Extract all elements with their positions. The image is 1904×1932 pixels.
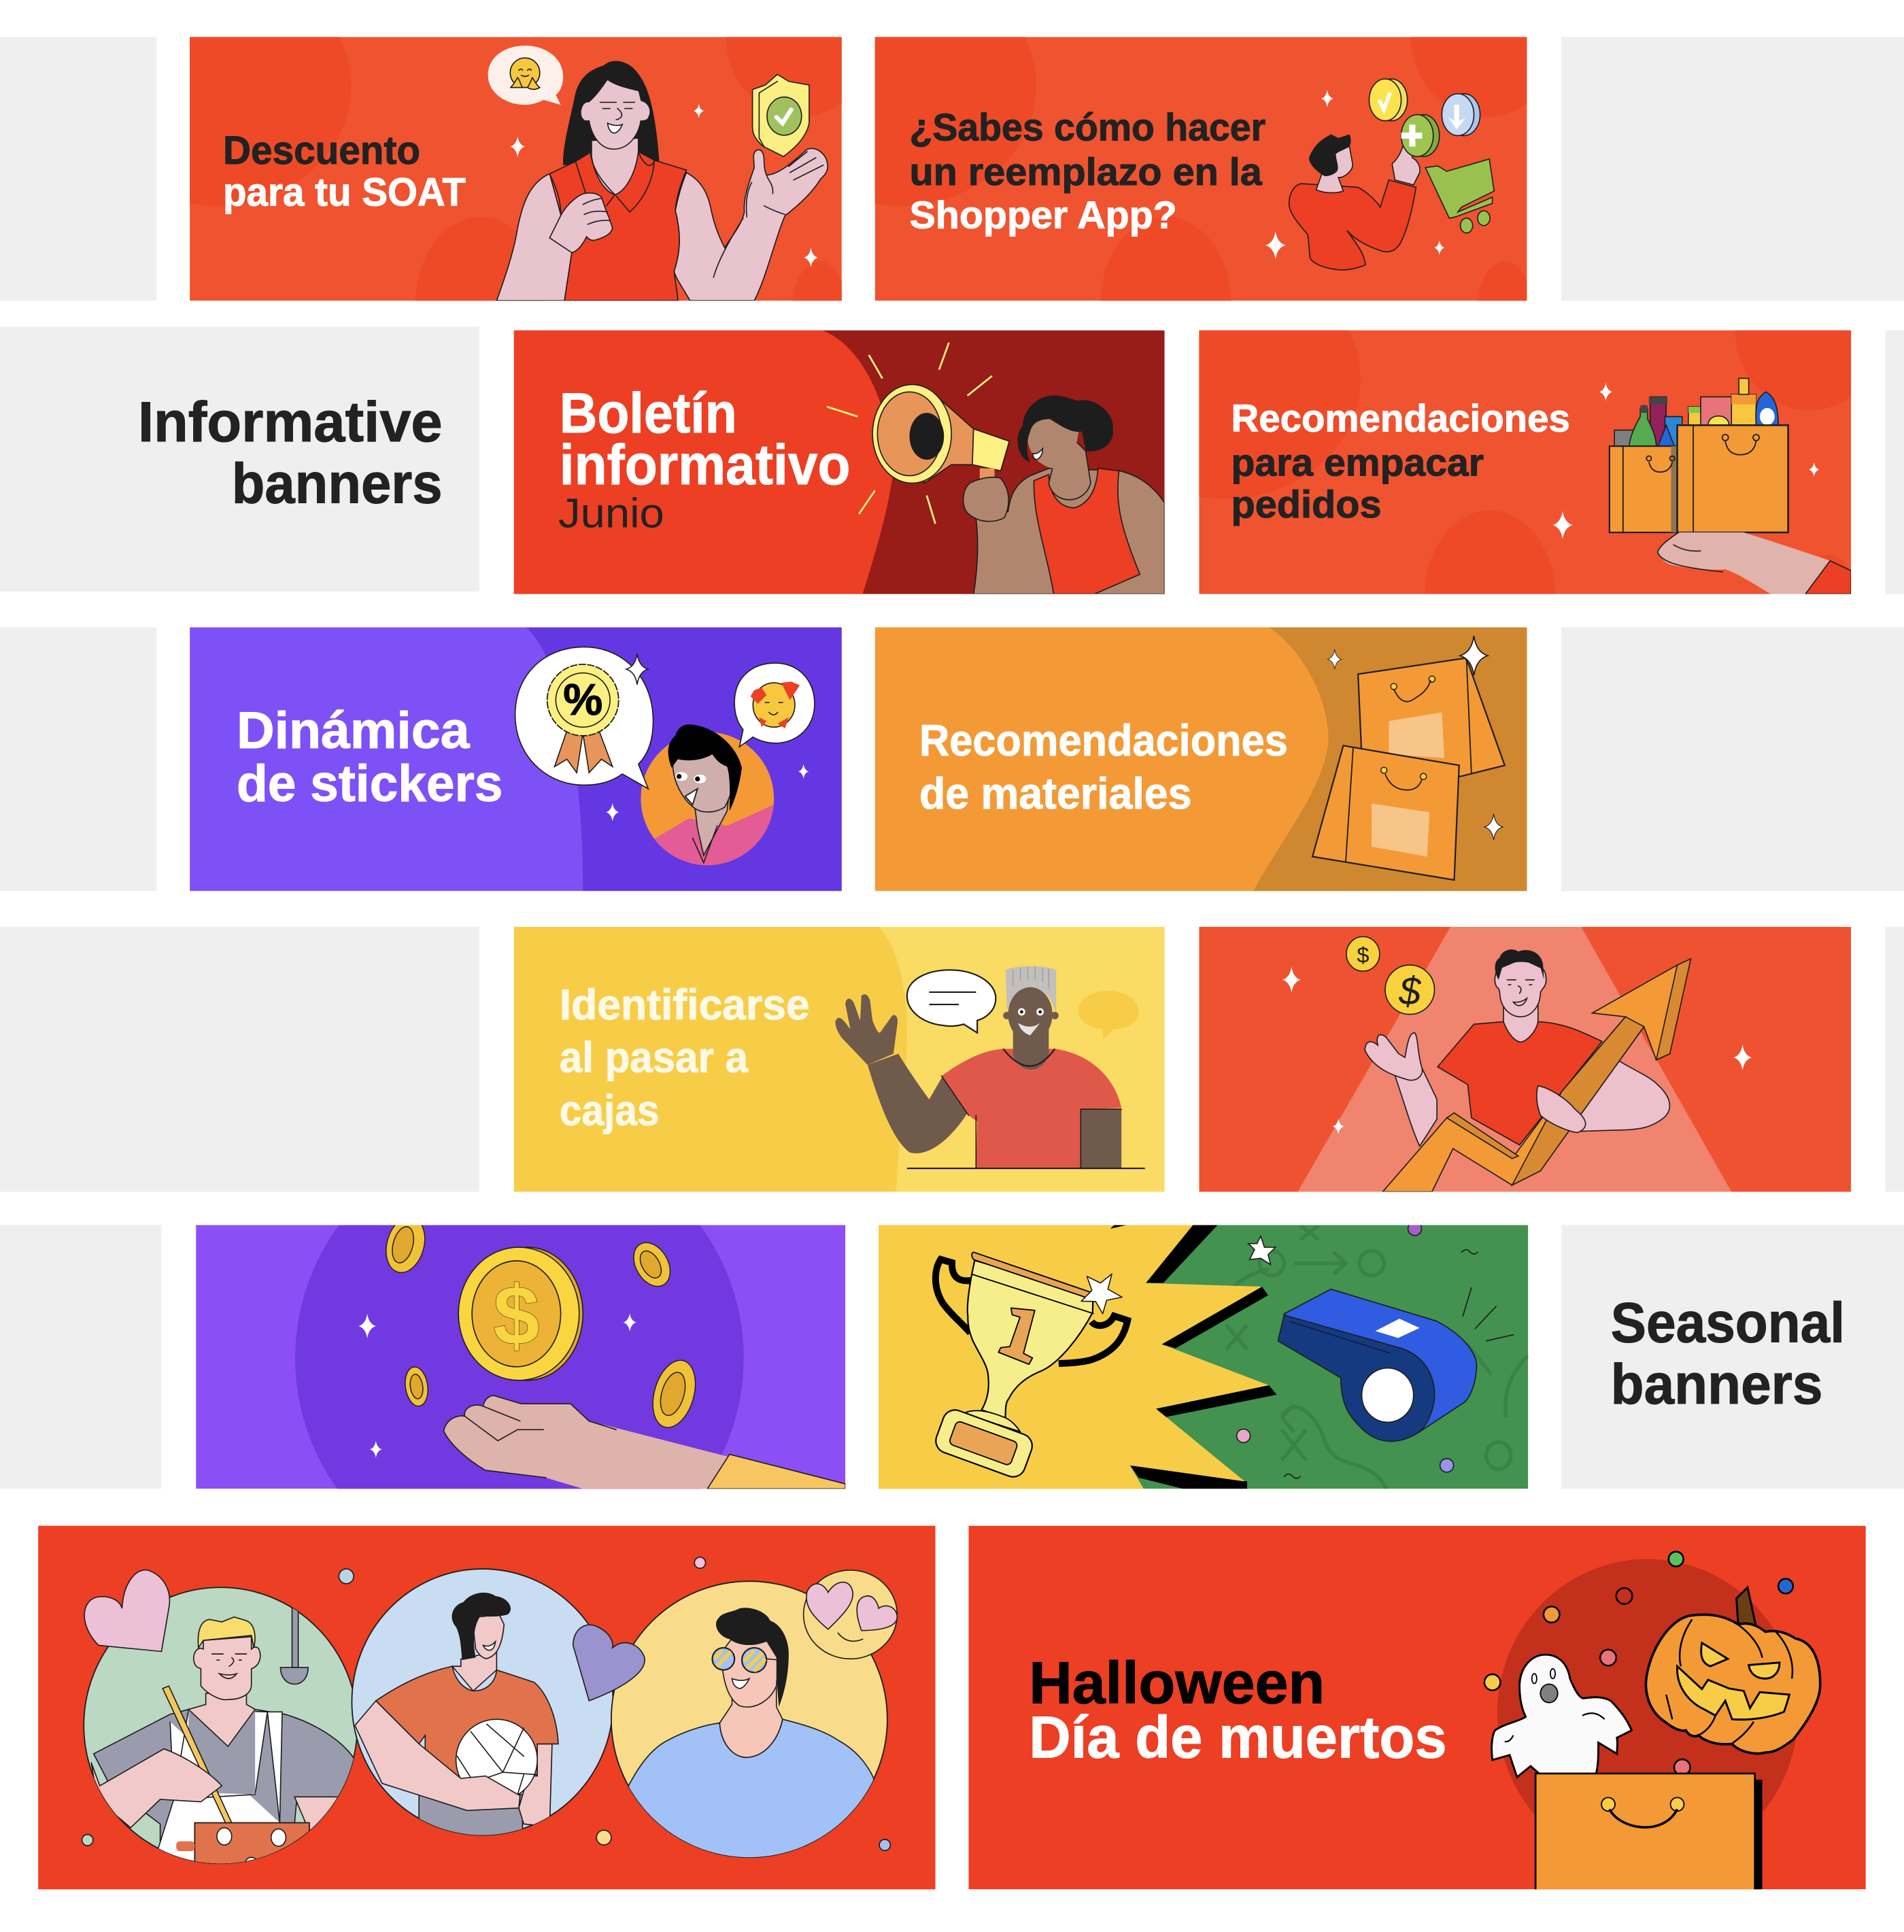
heading: informativo — [560, 433, 850, 496]
portrait — [641, 724, 774, 865]
decorative star and dots — [1237, 1222, 1478, 1478]
heading: Día de muertos — [1029, 1704, 1447, 1770]
portrait: man with glasses — [611, 1581, 887, 1867]
heading: al pasar a — [560, 1034, 749, 1082]
sparkles — [1265, 90, 1444, 260]
panel: descuento SOAT banner — [190, 37, 842, 301]
icons: app buttons — [1369, 79, 1480, 156]
heading: Descuento — [223, 129, 420, 173]
heading: un reemplazo en la — [909, 150, 1263, 193]
heading: para tu SOAT — [223, 171, 466, 215]
panel: people portraits banner — [38, 1526, 936, 1889]
man — [836, 966, 1145, 1168]
heading — [909, 106, 1265, 236]
heading: Halloween — [1029, 1650, 1325, 1716]
speech bubble with emoji — [488, 46, 563, 105]
heading: Dinámica — [237, 702, 470, 760]
panel: identificarse al pasar a cajas banner — [514, 927, 1165, 1192]
icon: large dollar coin — [458, 1247, 583, 1380]
heading — [559, 390, 849, 528]
icon: large dollar coin: $ — [493, 1269, 540, 1363]
sparkles — [606, 654, 809, 821]
starburst — [879, 1225, 1277, 1489]
panel: seasonal banners label — [1561, 1225, 1904, 1489]
sparkles — [1328, 636, 1503, 840]
arrow — [1382, 959, 1690, 1192]
panel: growth arrow banner — [1199, 927, 1851, 1192]
panel: coins banner — [196, 1134, 845, 1582]
woman with megaphone — [974, 395, 1165, 594]
heading: de materiales — [919, 768, 1191, 818]
icon: pink heart — [84, 1570, 169, 1651]
icon: shopping cart — [1425, 159, 1494, 233]
panel: grey filler blocks — [0, 37, 1904, 1489]
pattern: game play marks — [1226, 1225, 1528, 1489]
heading: cajas — [560, 1087, 660, 1135]
speech bubble with emoji — [734, 663, 815, 747]
icon: megaphone — [872, 384, 1009, 522]
man — [1365, 949, 1669, 1146]
heading: Identificarse — [560, 981, 810, 1029]
panel: reemplazo banner — [874, 37, 1527, 301]
shopper figure — [1289, 135, 1420, 270]
heading: de stickers — [237, 755, 503, 813]
icons: dollar coins: $ — [1357, 942, 1369, 967]
hand — [1658, 532, 1851, 594]
hand — [443, 1395, 845, 1489]
heading — [919, 715, 1288, 818]
confetti dots — [82, 1557, 890, 1850]
icons: small coins — [380, 1213, 702, 1433]
percent sign: % — [563, 675, 602, 724]
panel: seasonal banners label: banners — [1611, 1353, 1822, 1416]
heading — [1231, 396, 1570, 526]
speech bubble with medal — [515, 647, 653, 789]
icon: pumpkin — [1646, 1587, 1820, 1753]
heading: Boletín — [560, 382, 737, 445]
panel: dinámica de stickers banner — [190, 627, 842, 891]
sparkles — [1282, 967, 1752, 1134]
icon: orange bag — [1535, 1774, 1763, 1892]
heading: Recomendaciones — [919, 715, 1288, 765]
icon: front bag — [1312, 745, 1459, 880]
portrait: volleyball player — [352, 1569, 613, 1839]
heading — [1029, 1650, 1447, 1770]
panel: halloween banner — [968, 1526, 1866, 1892]
panel: informative banners label: Informative — [138, 390, 443, 454]
portrait: cook — [84, 1587, 358, 1874]
icon: emoji with hearts — [804, 1570, 897, 1659]
icon: back bag — [1358, 658, 1505, 777]
sparkles — [510, 103, 818, 267]
woman — [496, 61, 828, 301]
sparkles — [358, 1313, 636, 1458]
sparkles — [1552, 383, 1819, 539]
panel: informative banners label: banners — [232, 452, 443, 515]
icons: dollar coins — [1346, 936, 1435, 1015]
panel: boletín informativo banner — [514, 331, 1165, 594]
heading — [238, 709, 501, 802]
icon: purple heart — [573, 1625, 645, 1701]
heading: Junio — [558, 490, 664, 537]
heading: ¿Sabes cómo hacer — [909, 106, 1265, 149]
panel: trophy and whistle banner — [879, 1222, 1528, 1489]
heading: pedidos — [1231, 483, 1382, 526]
heading: Shopper App? — [909, 193, 1177, 236]
icon: shopping bags — [1610, 425, 1788, 532]
heading — [560, 981, 810, 1135]
icon: whistle — [1278, 1288, 1514, 1442]
panel: recomendaciones de materiales banner — [875, 627, 1527, 891]
arrows: sound lines — [827, 343, 992, 524]
grocery products — [1614, 378, 1778, 447]
heading: Recomendaciones — [1231, 396, 1570, 439]
speech bubbles — [907, 970, 1139, 1039]
icon: ghost — [1492, 1655, 1631, 1777]
heading: para empacar — [1231, 441, 1484, 484]
confetti dots — [1484, 1552, 1793, 1776]
panel: informative banners label — [0, 326, 479, 592]
icon: trophy — [932, 1252, 1127, 1480]
panel: seasonal banners label: Seasonal — [1611, 1291, 1845, 1355]
heading — [223, 129, 466, 215]
icon: shield — [753, 74, 809, 156]
panel: recomendaciones para empacar banner — [1199, 331, 1851, 594]
icons: dollar coins: $ — [1398, 970, 1422, 1013]
